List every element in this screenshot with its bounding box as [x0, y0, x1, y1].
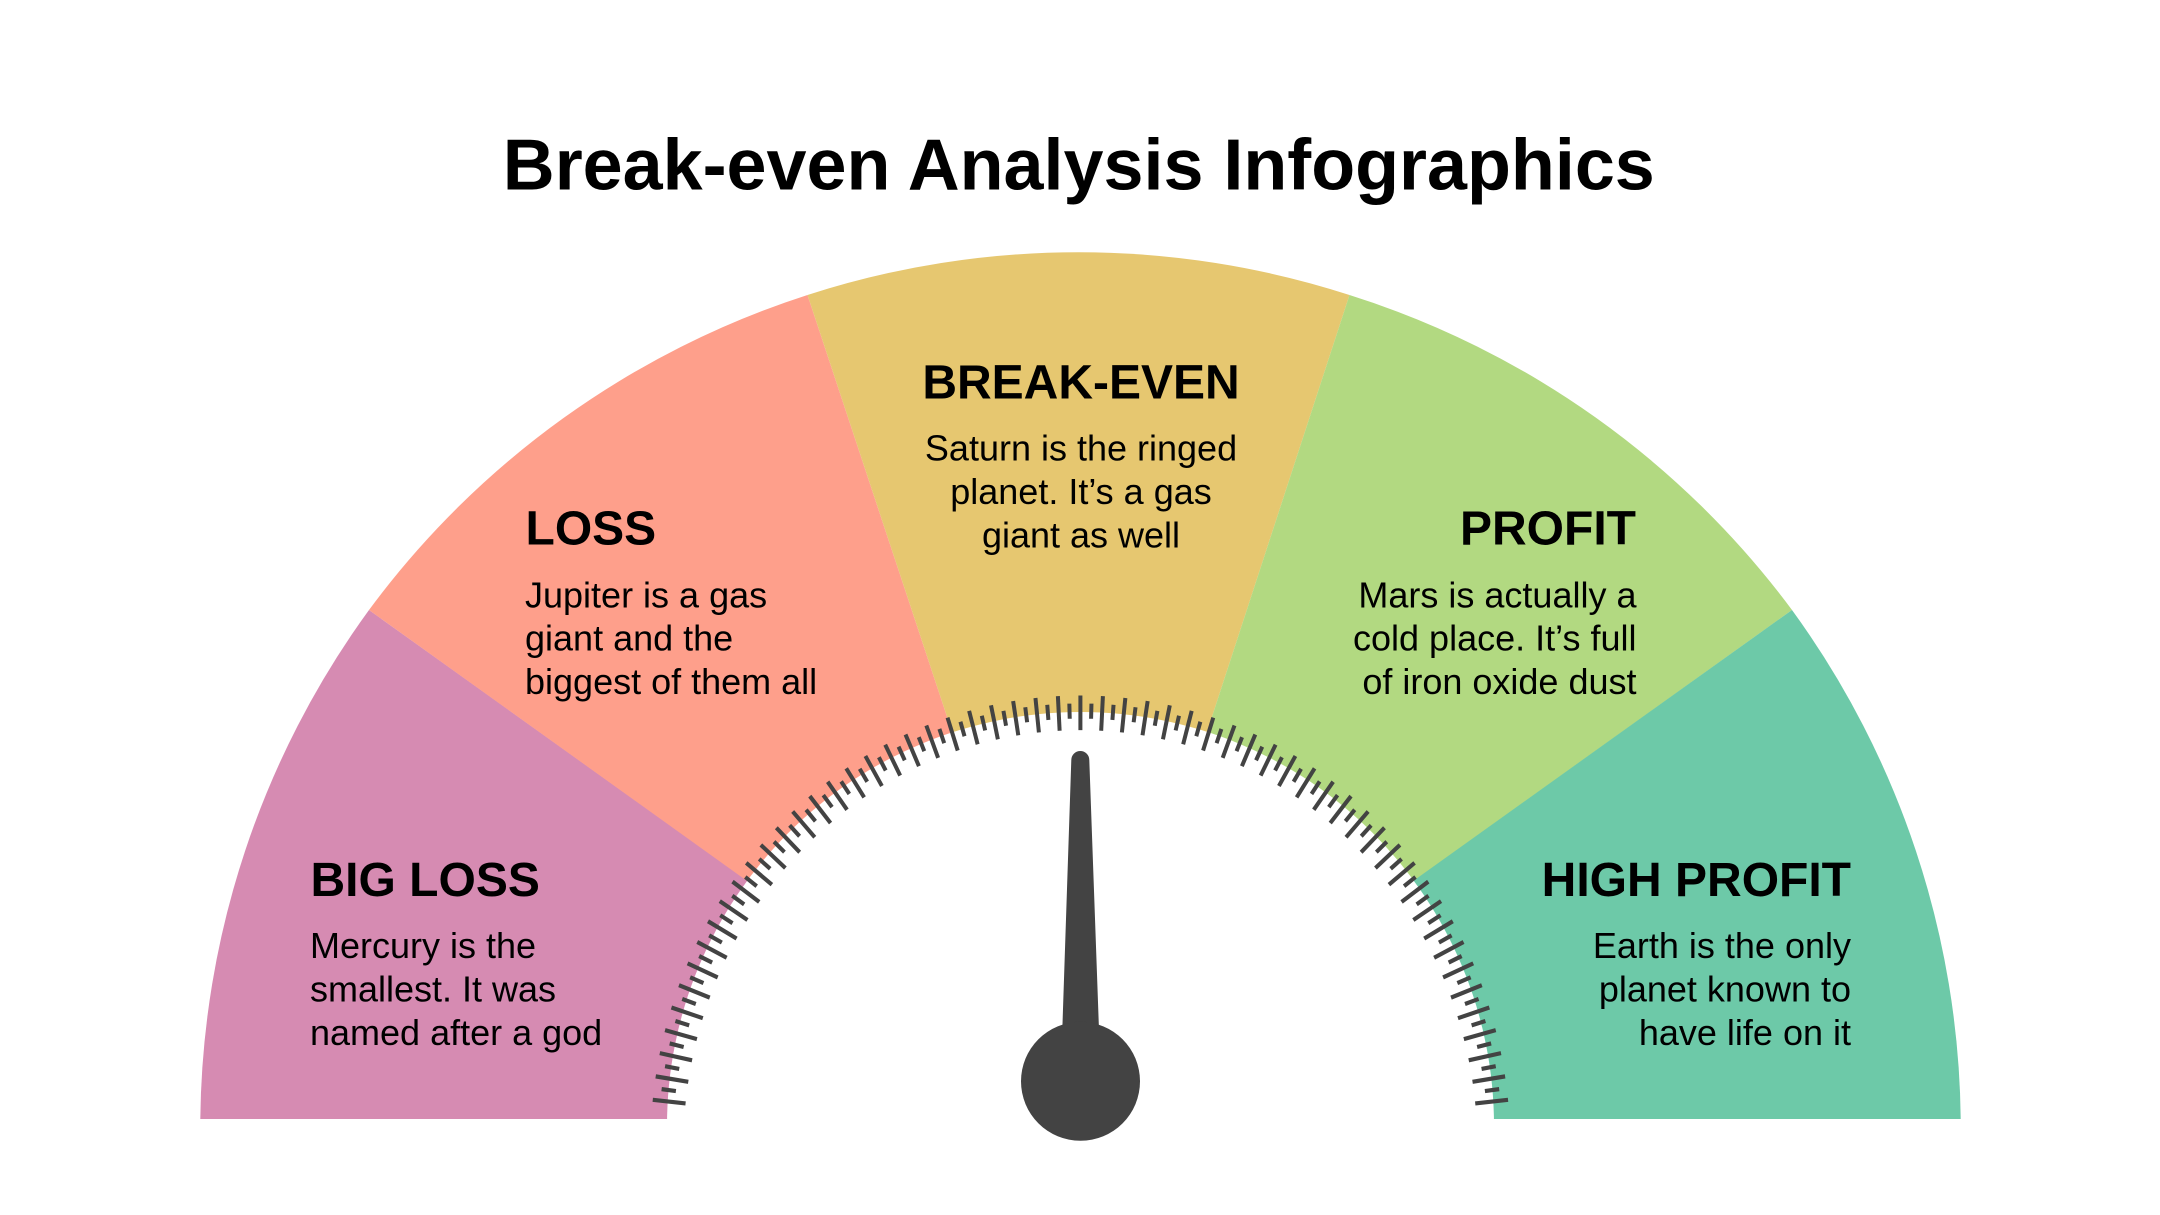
heading: profit: PROFIT: [1460, 503, 1636, 556]
body: loss: biggest of them all: [525, 661, 817, 702]
body: loss: giant and the: [525, 618, 733, 658]
gauge inner white cutout: [667, 712, 1494, 1126]
body: big loss: smallest. It was: [310, 968, 556, 1010]
heading: loss: LOSS: [526, 503, 656, 556]
body: profit: cold place. It’s full: [1353, 618, 1636, 658]
body: break-even: planet. It’s a gas: [950, 471, 1212, 512]
body: high profit: have life on it: [1639, 1012, 1851, 1053]
text block: break-even: [922, 357, 1240, 556]
title: Break-even Analysis Infographics: [503, 126, 1655, 206]
heading: break-even: BREAK-EVEN: [922, 357, 1240, 410]
body: big loss: Mercury is the: [310, 925, 536, 966]
sector: big loss: [200, 610, 1081, 1119]
body: big loss: named after a god: [310, 1012, 602, 1053]
body: profit: Mars is actually a: [1358, 574, 1637, 616]
tick scale: [653, 696, 1508, 1103]
text block: loss: [525, 503, 817, 702]
text block: profit: [1353, 503, 1637, 702]
body: break-even: Saturn is the ringed: [925, 428, 1237, 469]
sector: high profit: [1080, 610, 1961, 1119]
gauge needle: [1021, 751, 1140, 1141]
sector: profit: [1080, 295, 1792, 1120]
body: high profit: Earth is the only: [1593, 925, 1851, 966]
body: break-even: giant as well: [982, 515, 1180, 556]
sector: loss: [369, 295, 1080, 1120]
text block: high profit: [1542, 854, 1851, 1053]
heading: big loss: BIG LOSS: [310, 854, 540, 907]
heading: high profit: HIGH PROFIT: [1542, 854, 1851, 907]
body: profit: of iron oxide dust: [1362, 661, 1636, 702]
text block: big loss: [310, 854, 602, 1053]
gauge sectors: [200, 252, 1961, 1120]
sector: break-even: [808, 252, 1350, 1120]
body: loss: Jupiter is a gas: [525, 574, 767, 616]
body: high profit: planet known to: [1599, 968, 1851, 1010]
